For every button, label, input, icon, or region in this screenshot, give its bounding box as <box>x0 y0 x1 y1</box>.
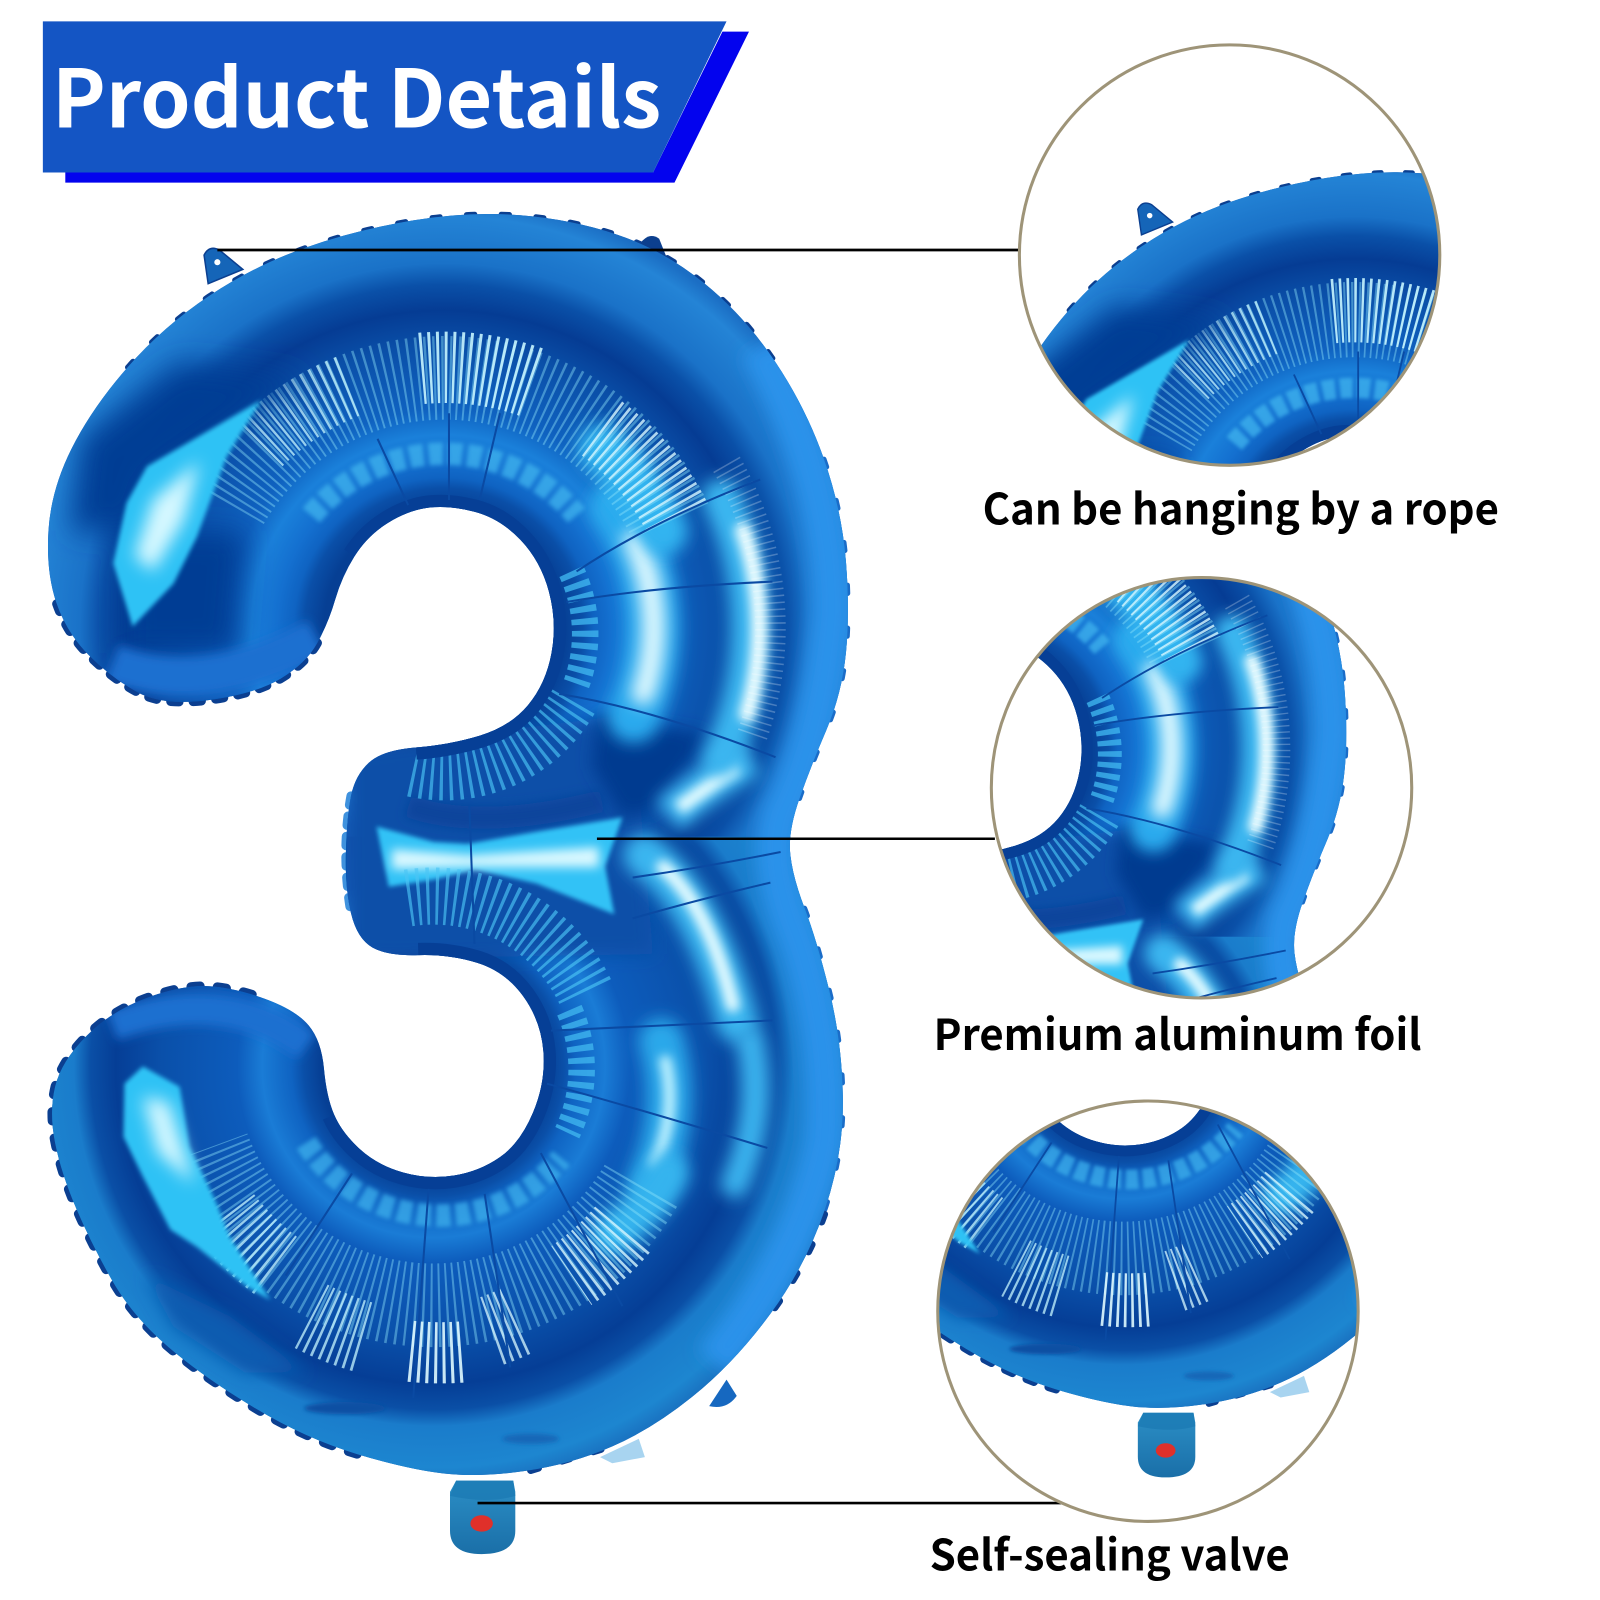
lighter outer band on the right <box>714 347 832 1362</box>
lower terminal highlight <box>112 1009 306 1372</box>
leader line: foil <box>597 838 995 840</box>
junction shading <box>347 714 750 959</box>
upper terminal highlight <box>71 363 316 676</box>
lower band reflections <box>304 1402 559 1444</box>
detail circle: hanging tab <box>1018 43 1442 467</box>
detail circle: foil <box>990 576 1414 1000</box>
label: foil: Premium aluminum foil <box>934 1001 1421 1063</box>
leader line: valve <box>478 1502 1063 1504</box>
foil balloon number 3 <box>0 184 878 1554</box>
crease lines <box>286 413 781 1398</box>
middle ripple bands <box>306 454 587 1216</box>
scalloped seam edge <box>52 214 848 1470</box>
title banner <box>43 21 749 183</box>
detail circle: valve <box>936 1100 1360 1523</box>
label: valve: Self-sealing valve <box>930 1521 1290 1583</box>
pale foil flap <box>600 1439 645 1463</box>
title banner: Product Details <box>52 35 661 152</box>
hole rim <box>334 507 554 1177</box>
pleat ribs <box>208 367 770 1353</box>
label: rope: Can be hanging by a rope <box>983 475 1499 537</box>
balloon body shading <box>0 184 878 1510</box>
hanging tabs <box>204 236 737 1407</box>
inflation valve <box>450 1481 515 1554</box>
leader line: hanging tab <box>217 249 1020 251</box>
bright vertical bands <box>602 449 759 1235</box>
